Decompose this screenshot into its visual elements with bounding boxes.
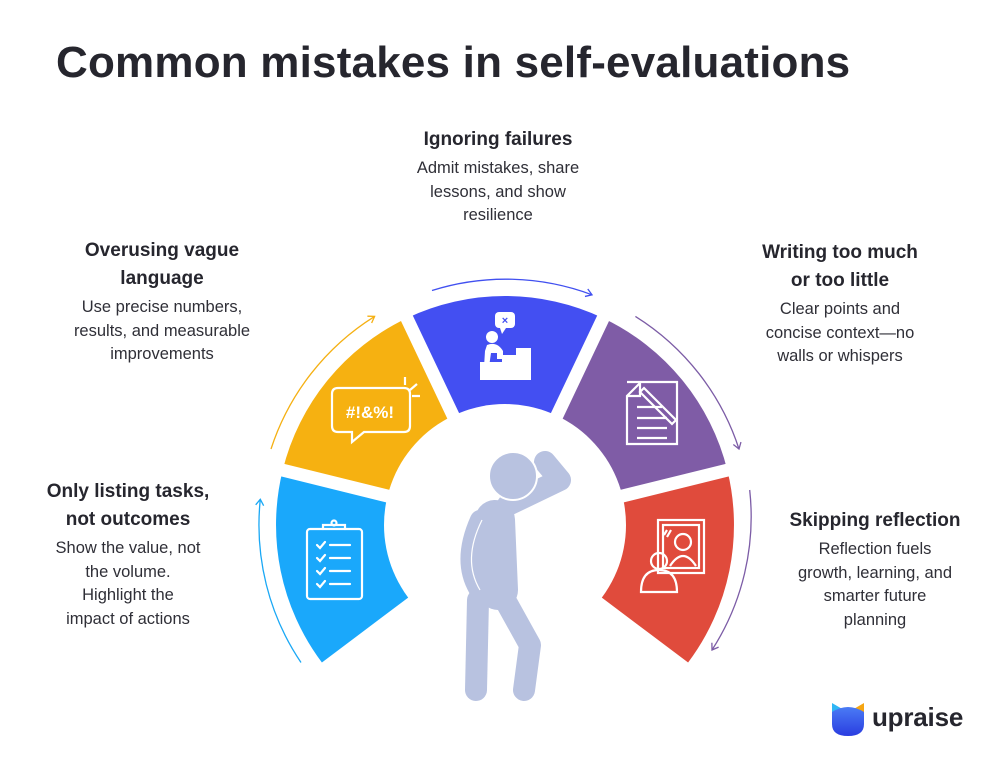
icon: document with pencil — [627, 382, 677, 444]
segment: indigo — [407, 296, 603, 417]
arrow: right arc — [712, 490, 751, 650]
logo: upraise — [832, 702, 963, 736]
icon: person on stairs — [480, 312, 531, 380]
icon: speech bubble — [332, 377, 420, 442]
text: vague language: results, and measurable — [74, 322, 250, 340]
icon: clipboard — [307, 520, 362, 599]
text: too much or too little: or too little — [791, 270, 889, 291]
text: skipping reflection: Reflection fuels — [819, 540, 931, 558]
icon: person on stairs: × — [502, 315, 508, 327]
text: too much or too little: Writing too much — [762, 242, 918, 263]
icon: speech bubble: #!&%! — [346, 403, 394, 422]
text: ignoring failures: Admit mistakes, share — [417, 159, 579, 177]
text: listing tasks: Show the value, not — [56, 539, 200, 557]
text: listing tasks: Only listing tasks, — [47, 481, 209, 502]
text: vague language: Use precise numbers, — [82, 298, 242, 316]
text: skipping reflection: smarter future — [824, 587, 926, 605]
arrow: blue arc — [259, 499, 301, 662]
text: listing tasks: Highlight the — [82, 586, 174, 604]
text: vague language — [74, 240, 250, 363]
figure: confused person — [470, 452, 560, 690]
text: listing tasks: the volume. — [85, 562, 171, 580]
text: ignoring failures: lessons, and show — [430, 182, 566, 200]
arrow: purple arc — [635, 316, 739, 449]
text: too much or too little: walls or whispers — [777, 347, 903, 365]
text: too much or too little — [762, 242, 918, 365]
text: ignoring failures: Ignoring failures — [424, 129, 572, 150]
segment: red — [601, 470, 734, 662]
text: ignoring failures: resilience — [463, 206, 533, 224]
text: skipping reflection: Skipping reflection — [789, 510, 961, 531]
title: Common mistakes in self-evaluations — [56, 38, 850, 87]
text: vague language: Overusing vague — [85, 240, 239, 261]
text: skipping reflection: growth, learning, and — [798, 564, 952, 582]
text: listing tasks — [47, 481, 209, 628]
text: too much or too little: concise context—no — [766, 324, 914, 342]
arrow: yellow arc — [271, 316, 375, 449]
text: ignoring failures — [417, 129, 579, 224]
logo: upraise: upraise — [872, 702, 963, 732]
text: vague language: improvements — [110, 345, 214, 363]
segment: yellow — [283, 318, 454, 496]
text: vague language: language — [120, 268, 204, 289]
icon: person at mirror — [641, 520, 704, 592]
text: skipping reflection: planning — [844, 610, 906, 628]
text: too much or too little: Clear points and — [780, 300, 900, 318]
text: listing tasks: not outcomes — [66, 509, 190, 530]
segment: blue — [276, 470, 409, 662]
arrow: top arc — [432, 279, 592, 295]
segment: purple — [556, 318, 727, 496]
text: skipping reflection — [789, 510, 961, 628]
text: listing tasks: impact of actions — [66, 610, 190, 628]
